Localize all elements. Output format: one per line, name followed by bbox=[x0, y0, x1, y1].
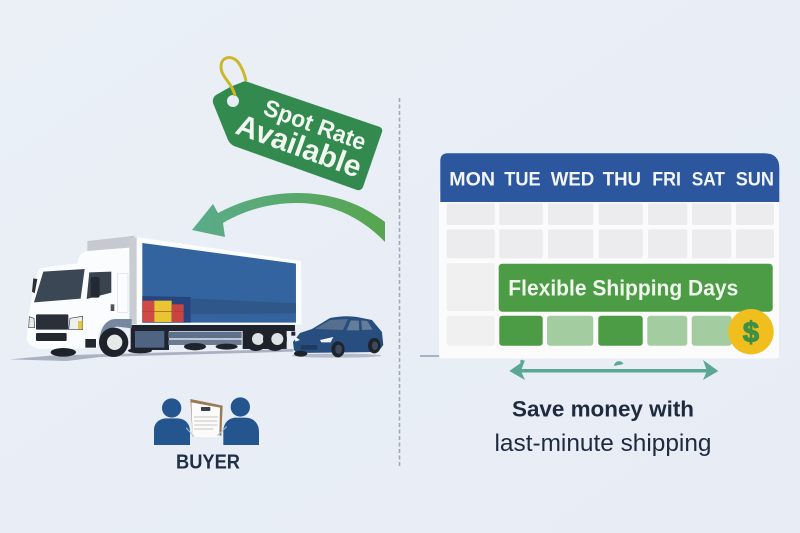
grey day cells bbox=[447, 203, 774, 346]
blue side panel bbox=[142, 243, 296, 323]
flexible shipping days bar bbox=[499, 264, 773, 312]
ground shadow bbox=[10, 349, 293, 361]
divider bbox=[398, 98, 400, 467]
grille bbox=[36, 314, 68, 330]
caption bbox=[494, 396, 712, 457]
weekday labels: MON bbox=[449, 169, 495, 191]
tag text: Available bbox=[232, 109, 366, 184]
calendar shadow bbox=[420, 355, 440, 357]
calendar bbox=[420, 153, 779, 358]
weekday labels: SAT bbox=[692, 169, 725, 191]
caption: last-minute shipping bbox=[494, 430, 712, 457]
clipboard bbox=[190, 399, 223, 437]
green day cells bbox=[499, 316, 543, 346]
dollar coin: $ bbox=[743, 317, 759, 349]
calendar: Flexible Shipping Days bbox=[508, 276, 738, 301]
string loop bbox=[221, 58, 246, 96]
headlights bbox=[69, 316, 83, 330]
chassis bbox=[132, 325, 295, 331]
tag text: Spot Rate bbox=[260, 94, 370, 155]
right person bbox=[223, 397, 259, 445]
buyer icon bbox=[154, 397, 259, 445]
weekday labels: TUE bbox=[504, 169, 541, 191]
dollar coin bbox=[728, 309, 774, 354]
weekday labels: SUN bbox=[736, 169, 774, 191]
weekday labels: FRI bbox=[652, 169, 681, 191]
front wheels bbox=[51, 348, 76, 357]
truck bbox=[10, 236, 302, 361]
car bbox=[292, 316, 383, 358]
windshield bbox=[34, 269, 85, 302]
left person bbox=[154, 398, 190, 445]
double-headed arrow bbox=[509, 360, 718, 380]
caption: Save money with bbox=[512, 396, 694, 422]
rear wheels bbox=[244, 327, 268, 351]
buyer label: BUYER bbox=[176, 452, 241, 474]
cargo box bbox=[134, 237, 302, 324]
calendar header bbox=[440, 153, 779, 202]
curved arrow bbox=[192, 193, 385, 242]
weekday labels bbox=[449, 169, 774, 191]
weekday labels: THU bbox=[603, 169, 641, 191]
door panel bbox=[117, 273, 128, 312]
roof fairing bbox=[87, 236, 135, 258]
weekday labels: WED bbox=[551, 169, 594, 191]
price tag: spot rate available bbox=[213, 58, 382, 190]
side window bbox=[87, 272, 111, 299]
cargo boxes bbox=[142, 301, 184, 322]
cab bbox=[27, 248, 129, 349]
